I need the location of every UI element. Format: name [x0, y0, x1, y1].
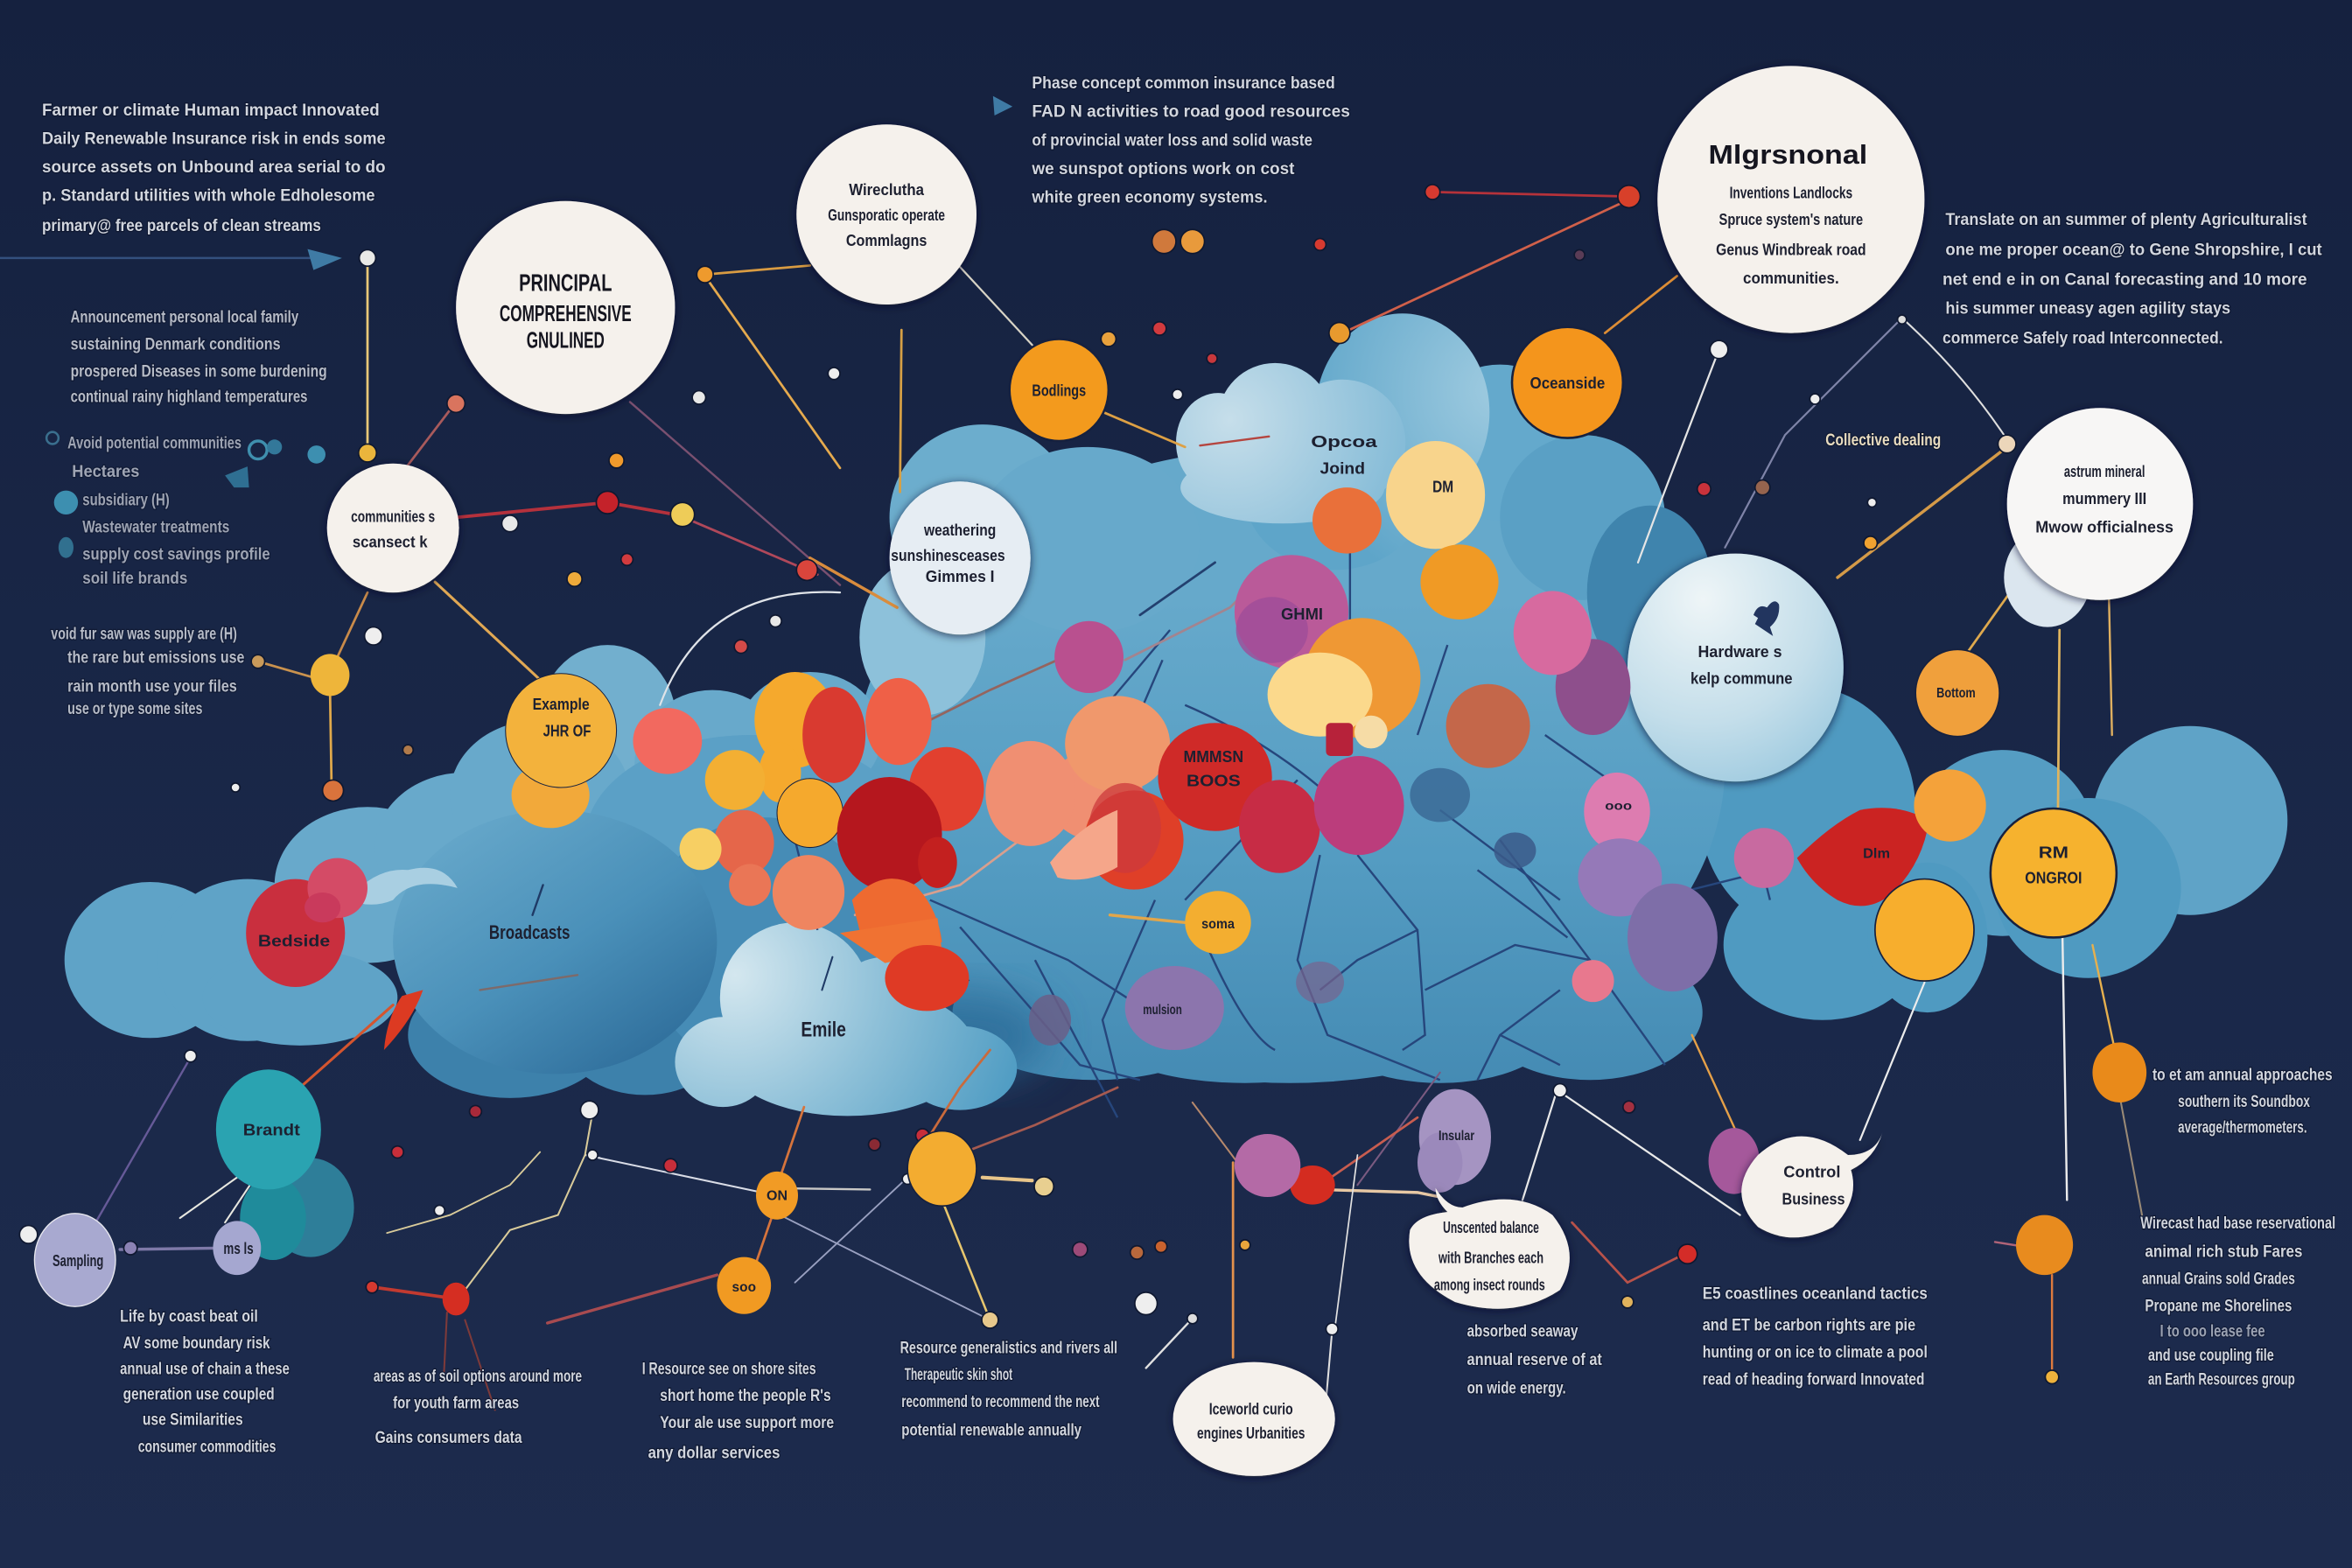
text: left block 4: use or type some sites [67, 699, 202, 718]
text: top centre block [1031, 74, 1350, 206]
white bubble: centre cloud text: Gimmes I [926, 567, 995, 585]
text: left block 3: Hectares [72, 462, 139, 481]
pale bubble text: kelp commune [1690, 669, 1793, 688]
text: top right block: Translate on an summer of plenty Agriculturalist [1945, 210, 2307, 229]
node: orange right lower [2092, 1042, 2146, 1102]
text: lower block left of centre [642, 1359, 834, 1462]
text: left block 3: supply cost savings profile [82, 544, 270, 564]
white bubble: top right: Genus Windbreak road [1716, 240, 1866, 258]
label: lavender left: Sampling [52, 1251, 103, 1270]
node: red small [443, 1283, 470, 1315]
label: lilac lower: Insular [1438, 1129, 1474, 1144]
callout: centre bottom bubble: Unscented balance [1443, 1218, 1539, 1236]
node: lilac lower [1418, 1089, 1491, 1193]
text: top left block: p. Standard utilities with whole Edholesome [42, 186, 375, 206]
white bubble: right: mummery III [2062, 489, 2146, 508]
callout: bottom bubble: Iceworld curio [1209, 1400, 1293, 1418]
label: red left: Bedside [258, 932, 330, 950]
text: under callout block: absorbed seaway [1467, 1321, 1578, 1340]
text: right lower block: Propane me Shorelines [2145, 1296, 2292, 1315]
node: yellow label medium [1185, 891, 1251, 954]
text: left block 3: soil life brands [82, 569, 187, 588]
white bubble: centre cloud text [891, 521, 1005, 585]
text: top left block: primary@ free parcels of clean streams [42, 216, 321, 235]
text: lower block left of centre: any dollar services [648, 1443, 780, 1462]
cloud shading [870, 990, 1050, 1080]
cloud: lower pale cloud [675, 922, 1017, 1116]
small light puff on left [348, 868, 458, 905]
blobs: left warm cluster [506, 672, 1404, 1011]
text: left block 3: Wastewater treatments [82, 518, 229, 537]
text: top centre block: FAD N activities to road good resources [1032, 102, 1350, 122]
arrow: top left [0, 249, 342, 270]
white bubble: top centre: Wireclutha [849, 180, 924, 199]
cloud: top lobe [1245, 313, 1489, 570]
white bubble: principal: COMPREHENSIVE [500, 302, 632, 326]
label: teal: Brandt [243, 1121, 301, 1139]
white bubble: top centre: Commlagns [846, 231, 927, 249]
text: lower centre block: recommend to recommend the next [901, 1392, 1100, 1411]
text: solution label: Collective dealing [1825, 430, 1941, 450]
dots scattered across background [19, 185, 2059, 1383]
node: orange far lower [2016, 1215, 2073, 1275]
label: red right: Dlm [1863, 847, 1890, 862]
text: left block 4: void fur saw was supply are (H) [51, 624, 237, 643]
icons: teal small markers [46, 432, 326, 558]
label: orange top: Bodlings [1032, 382, 1086, 400]
text: lower centre right block: read of heading forward Innovated [1703, 1369, 1924, 1389]
node labels [52, 374, 2082, 1295]
white bubble: principal: GNULINED [527, 329, 605, 354]
callout: lower right bubble [1741, 1132, 1882, 1237]
label: red centre second: BOOS [1186, 771, 1241, 789]
text: lower left centre block [374, 1367, 582, 1447]
text: left block 4: the rare but emissions use [67, 648, 244, 668]
cloud: small pale puff [1176, 363, 1405, 523]
text: top left block: source assets on Unbound area serial to do [42, 158, 386, 177]
white bubble: top centre: Gunsporatic operate [828, 206, 945, 224]
text: lower centre right block: hunting or on ice to climate a pool [1703, 1342, 1928, 1362]
label: cream blob: DM [1432, 477, 1453, 495]
text: top right block: one me proper ocean@ to Gene Shropshire, I cut [1945, 240, 2322, 259]
text: lower left block [120, 1306, 290, 1456]
label: yellow big second: ONGROI [2025, 869, 2082, 887]
cloud: right section [1699, 687, 2287, 1020]
network lines inside cloud [795, 540, 1770, 1117]
text: top left block: Daily Renewable Insurance risk in ends some [42, 130, 386, 149]
text: lower block left of centre: short home the people R's [660, 1386, 831, 1405]
white bubble: right [2007, 408, 2193, 600]
pale bubble text: Hardware s [1698, 642, 1782, 661]
white bubble: right: Mwow officialness [2035, 518, 2174, 536]
label: lower left cloud: Broadcasts [489, 921, 570, 943]
coloured node blobs [34, 327, 2146, 1315]
text: top right block [1942, 210, 2322, 348]
text: right mid block [2152, 1065, 2333, 1137]
node: orange bottom b [717, 1257, 771, 1314]
node: red left wedge [384, 990, 423, 1050]
text: lower left block: use Similarities [143, 1410, 243, 1430]
text: right lower block [2140, 1214, 2335, 1389]
text: top right block: his summer uneasy agen agility stays [1945, 298, 2230, 318]
node: orange right [1915, 649, 1999, 737]
icon: small bird [1754, 601, 1779, 636]
node: lavender left [34, 1214, 116, 1306]
node: red left [246, 858, 368, 987]
label: pale puff: Opcoa [1311, 432, 1377, 451]
text: lower left centre block: areas as of soil options around more [374, 1367, 582, 1386]
callout: lower right bubble: Business [1782, 1190, 1845, 1208]
text: lower centre block [900, 1338, 1117, 1440]
text: lower left block: Life by coast beat oil [120, 1306, 258, 1326]
white bubble: centre cloud text: weathering [923, 521, 996, 539]
text: right lower block: I to ooo lease fee [2160, 1321, 2265, 1340]
white bubble: left: communities s [351, 508, 435, 526]
callout: bottom bubble [1173, 1362, 1335, 1476]
text: left block 3: subsidiary (H) [82, 491, 170, 510]
text: left block 2: continual rainy highland temperatures [71, 387, 307, 406]
text: lower left block: annual use of chain a these [120, 1359, 290, 1378]
pale bubble text [1690, 642, 1793, 688]
text: left block 2 [71, 308, 327, 406]
white bubble: top right: communities. [1743, 269, 1839, 287]
white bubble: top right: Mlgrsnonal [1709, 139, 1867, 170]
blobs: right purple cluster [1029, 768, 1986, 1050]
label: pale cloud: Emile [801, 1018, 846, 1042]
bubble: right rear [2004, 528, 2091, 627]
text: top centre block: white green economy systems. [1032, 187, 1268, 206]
label: yellow big top: RM [2039, 844, 2068, 862]
text: under callout block [1467, 1321, 1602, 1398]
cloud: central section [855, 365, 1725, 1083]
label: pink right: ooo [1605, 800, 1632, 813]
text: under callout block: on wide energy. [1467, 1379, 1566, 1398]
white bubble: principal [456, 201, 675, 414]
blobs: top right cluster [1010, 327, 1630, 768]
node: lavender small [213, 1221, 261, 1275]
label: orange low: ON [766, 1188, 788, 1203]
callout: centre bottom bubble [1409, 1188, 1570, 1309]
white bubble: principal: PRINCIPAL [519, 270, 612, 297]
label: yellow left second: JHR OF [543, 722, 591, 740]
white bubble: top centre [796, 124, 976, 304]
text: lower centre block: potential renewable annually [901, 1421, 1082, 1440]
cloud: left section [65, 645, 915, 1098]
text: top left block [42, 101, 386, 235]
text: lower centre right block: E5 coastlines oceanland tactics [1703, 1284, 1928, 1304]
text: lower left block: generation use coupled [123, 1384, 275, 1404]
text: top right block: net end e in on Canal forecasting and 10 more [1942, 270, 2307, 290]
text: top centre block: we sunspot options work on cost [1031, 159, 1295, 178]
text: left block 3 [67, 434, 270, 588]
node: orange bottom a [756, 1172, 798, 1220]
text: lower left block: AV some boundary risk [123, 1334, 270, 1353]
white bubble: centre cloud text: sunshinesceases [891, 546, 1005, 564]
text: left block 2: prospered Diseases in some burdening [71, 361, 327, 381]
connector lines [93, 192, 2142, 1418]
text: left block 4: rain month use your files [67, 676, 237, 696]
text: lower block left of centre: I Resource see on shore sites [642, 1359, 816, 1378]
text: left block 4 [51, 624, 244, 718]
main cloud mass [65, 313, 2287, 1116]
text: left block 2: Announcement personal local family [71, 308, 298, 327]
white bubble: top right [1657, 66, 1924, 333]
label: yellow medium: soma [1201, 917, 1235, 932]
label: yellow left top: Example [533, 695, 590, 713]
text: lower left block: consumer commodities [138, 1437, 276, 1456]
node: amber small top left [311, 654, 349, 696]
text: lower centre block: Therapeutic skin shot [905, 1365, 1012, 1384]
text: top centre block: Phase concept common insurance based [1032, 74, 1335, 93]
label: purple mid: mulsion [1143, 1003, 1182, 1018]
text: top left block: Farmer or climate Human impact Innovated [42, 101, 380, 120]
text: under callout block: annual reserve of at [1467, 1350, 1602, 1369]
text: lower centre right block [1703, 1284, 1928, 1389]
white bubble: top right: Spruce system's nature [1719, 210, 1863, 228]
callout: centre bottom bubble: among insect rounds [1434, 1275, 1545, 1293]
node: amber bottom [907, 1131, 976, 1206]
text: left block 2: sustaining Denmark conditions [71, 334, 281, 354]
white bubble: right: astrum mineral [2064, 462, 2145, 480]
white bubble: left: scansect k [353, 533, 428, 551]
label: lavender small: ms ls [223, 1239, 254, 1257]
text: right lower block: animal rich stub Fares [2145, 1242, 2302, 1262]
text: lower left centre block: Gains consumers data [375, 1428, 522, 1447]
text: lower block left of centre: Your ale use support more [660, 1413, 834, 1432]
bubble: lower edge [890, 481, 1031, 634]
label: pale puff second line: Joind [1320, 459, 1365, 478]
white bubble: top right: Inventions Landlocks [1730, 183, 1852, 201]
label: orange cloud top: Oceanside [1530, 374, 1605, 392]
text: lower left centre block: for youth farm areas [393, 1394, 519, 1413]
callout: lower right bubble: Control [1783, 1163, 1840, 1181]
node: purple lower right [1709, 1128, 1760, 1194]
label: orange right: Bottom [1936, 686, 1976, 701]
label: purple blob: GHMI [1281, 605, 1323, 623]
label: red centre top: MMMSN [1184, 747, 1243, 766]
callout: bottom bubble: engines Urbanities [1197, 1424, 1305, 1442]
node: teal cluster [216, 1069, 354, 1260]
blobs: pale blue and rear bubbles [890, 481, 2091, 781]
icon: small teal arrow [993, 96, 1012, 116]
text: right lower block: and use coupling file [2148, 1346, 2274, 1365]
node: pink and red lower [1235, 1134, 1335, 1205]
text: left block 3: Avoid potential communities [67, 434, 242, 453]
text: lower centre block: Resource generalistics and rivers all [900, 1338, 1117, 1357]
text: lower centre right block: and ET be carbon rights are pie [1703, 1316, 1915, 1335]
text: top right block: commerce Safely road Interconnected. [1942, 329, 2223, 348]
node: yellow right [1875, 879, 1974, 981]
white bubble: left [327, 464, 459, 592]
callout: centre bottom bubble: with Branches each [1438, 1248, 1544, 1266]
node: yellow big [1991, 808, 2117, 937]
bubble: pale blue node [1628, 554, 1844, 781]
text: top centre block: of provincial water loss and solid waste [1032, 130, 1312, 150]
label: orange low two: soo [732, 1280, 756, 1295]
